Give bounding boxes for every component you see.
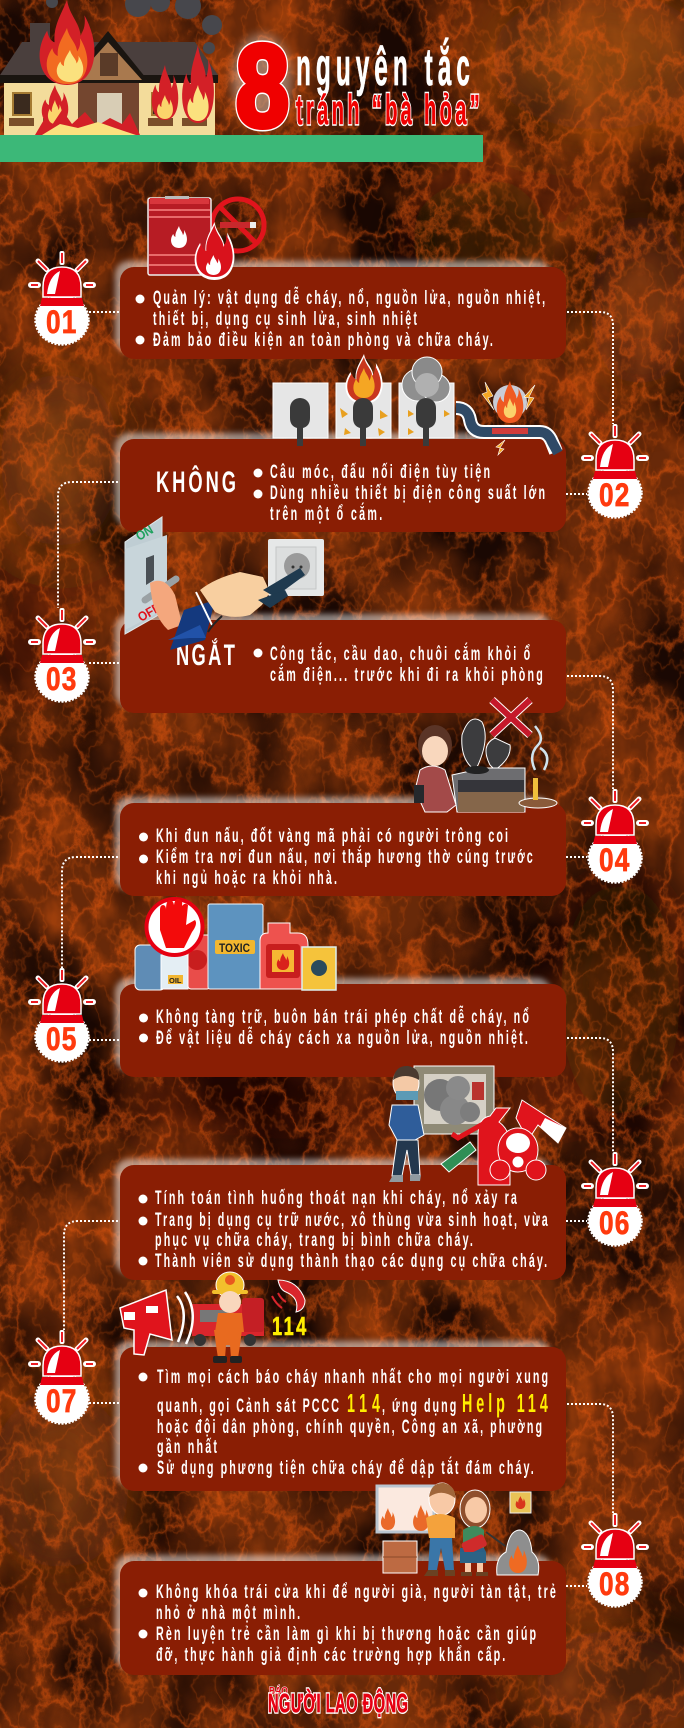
badge 01: 01 [46, 306, 76, 341]
badge 02: 02 [599, 479, 629, 514]
logo: Người Lao Động: NGƯỜI LAO ĐỘNG [268, 1689, 408, 1718]
panel 8: đỡ, thực hành giả định các trường hợp khẩn cấp. [156, 1644, 505, 1666]
icon: hazardous containers and stop hand: OIL [169, 976, 182, 985]
panel 3: NGẮT [176, 639, 235, 672]
title: tránh “bà hỏa” [296, 86, 480, 133]
panel 4: khi ngủ hoặc ra khỏi nhà. [156, 868, 337, 889]
panel 7: gần nhất [157, 1437, 217, 1458]
badge 04 [584, 789, 646, 882]
panel 6: Tính toán tình huống thoát nạn khi cháy, nổ xảy ra [155, 1187, 517, 1209]
panel 8: nhỏ ở nhà một mình. [156, 1603, 300, 1624]
panel 7 [115, 1341, 566, 1491]
connectors [58, 312, 613, 1586]
panel 7: Tìm mọi cách báo cháy nhanh nhất cho mọi người xung [157, 1367, 548, 1388]
panel 8 [115, 1555, 566, 1675]
icon: megaphone, fire truck, firefighter, phone [120, 1272, 307, 1363]
icon: hazardous containers and stop hand: TOXIC [219, 942, 250, 955]
badge 06: 06 [599, 1207, 629, 1242]
panel 1 [115, 261, 566, 359]
panel 2 [115, 433, 566, 532]
panel 3: Công tắc, cầu dao, chuôi cắm khỏi ổ [270, 641, 530, 665]
title: nguyên tắc [296, 37, 470, 97]
icon: overloaded sockets and sparking wires [273, 354, 558, 455]
icon: hazardous containers and stop hand [135, 898, 336, 990]
title [232, 22, 480, 151]
panel 1: thiết bị, dụng cụ sinh lửa, sinh nhiệt [153, 309, 418, 330]
badge 03 [31, 608, 93, 702]
panel 2: trên một ổ cắm. [270, 501, 382, 525]
panel 4: Kiểm tra nơi đun nấu, nơi thắp hương thờ cúng trước [156, 844, 533, 868]
panel 3: cắm điện... trước khi đi ra khỏi phòng [270, 662, 543, 686]
badge 04: 04 [599, 844, 630, 879]
icon: switch and hand unplugging: OFF [135, 600, 163, 625]
panel 7: quanh, gọi Cảnh sát PCCC [157, 1396, 339, 1417]
panel 4 [115, 797, 566, 896]
panel 4: Khi đun nấu, đốt vàng mã phải có người trông coi [156, 826, 508, 847]
panel 5 [115, 978, 566, 1077]
panel 8: Rèn luyện trẻ cần làm gì khi bị thương hoặc cần giúp [156, 1624, 536, 1645]
panel 7: 114 [347, 1390, 380, 1418]
panel 5: Để vật liệu dễ cháy cách xa nguồn lửa, nguồn nhiệt. [156, 1025, 528, 1049]
icon: switch and hand unplugging [125, 517, 324, 650]
panel 6 [115, 1159, 566, 1280]
icon: woman, stove smoke and incense [414, 700, 557, 812]
icon: children, window fire and extinguisher [377, 1483, 539, 1576]
panel 7: Help 114 [462, 1390, 548, 1418]
badge 07 [31, 1330, 93, 1424]
badge 08: 08 [599, 1568, 629, 1603]
panel 7: Sử dụng phương tiện chữa cháy để dập tắt đám cháy. [157, 1455, 534, 1479]
logo: Người Lao Động: NGƯỜI LAO ĐỘNG [268, 1689, 408, 1718]
icon: switch and hand unplugging: ON [133, 522, 156, 544]
badge 05: 05 [46, 1023, 76, 1058]
panel 6: Thành viên sử dụng thành thạo các dụng cụ chữa cháy. [155, 1251, 547, 1272]
badge 02 [584, 424, 646, 518]
panel 7: hoặc đội dân phòng, chính quyền, Công an xã, phường [157, 1417, 542, 1438]
title: 8 [236, 22, 289, 151]
panel 7: , ứng dụng [382, 1396, 456, 1417]
badge 08 [584, 1513, 646, 1606]
panel 1: Quản lý: vật dụng dễ cháy, nổ, nguồn lửa, nguồn nhiệt, [153, 285, 545, 309]
badge 01 [31, 251, 93, 344]
badge 07: 07 [46, 1385, 76, 1420]
header: green ribbon [0, 135, 483, 162]
panel 3 [115, 614, 566, 713]
header: burning house illustration [0, 0, 222, 135]
panel 2: KHÔNG [156, 466, 236, 499]
panel 5: Không tàng trữ, buôn bán trái phép chất dễ cháy, nổ [156, 1004, 529, 1028]
title: tránh “bà hỏa” [296, 86, 480, 133]
icon: no smoking sign, barrel and flame [148, 196, 264, 280]
panel 8: Không khóa trái cửa khi để người già, người tàn tật, trẻ [156, 1581, 556, 1603]
title: 8 [236, 22, 289, 151]
panel 2: Câu móc, đấu nối điện tùy tiện [270, 462, 490, 483]
panel 2: Dùng nhiều thiết bị điện công suất lớn [270, 483, 545, 504]
badge 03: 03 [46, 663, 76, 698]
panel 6: phục vụ chữa cháy, trang bị bình chữa cháy. [155, 1230, 473, 1251]
badge 05 [31, 968, 93, 1062]
badge 06 [584, 1152, 646, 1246]
icon: megaphone, fire truck, firefighter, phone: 114 [272, 1312, 307, 1341]
icon: man covering mouth, smoke, extinguisher, axe and mask [389, 1066, 566, 1185]
panel 6: Trang bị dụng cụ trữ nước, xô thùng vừa sinh hoạt, vừa [155, 1210, 548, 1231]
panel 1: Đảm bảo điều kiện an toàn phòng và chữa cháy. [153, 330, 493, 351]
logo: Người Lao Động: BÁO [269, 1685, 288, 1696]
